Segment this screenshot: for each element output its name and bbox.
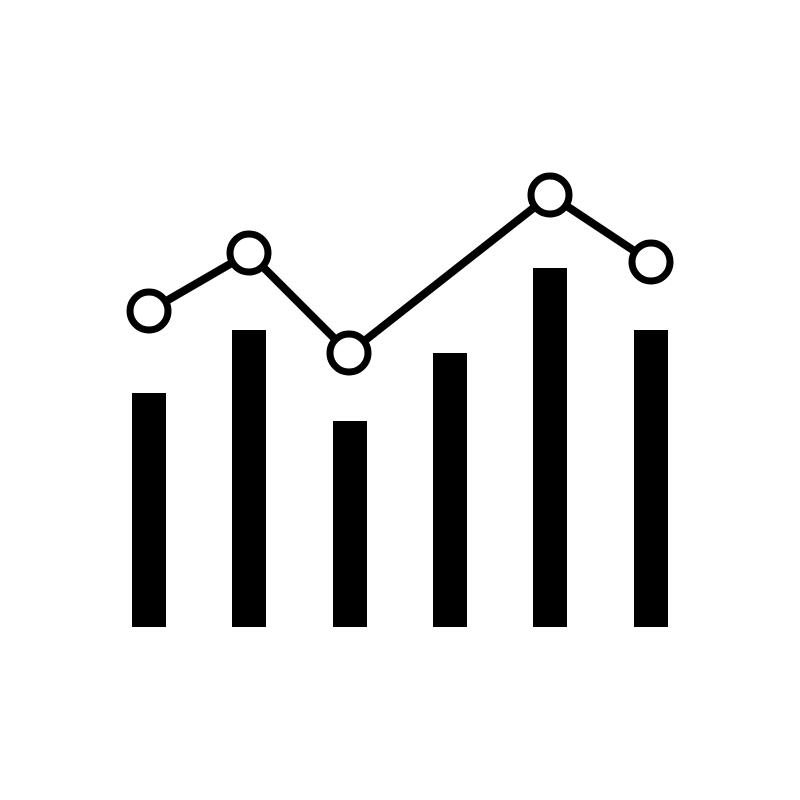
bar chart [132, 268, 668, 627]
trend line with markers [130, 176, 670, 372]
